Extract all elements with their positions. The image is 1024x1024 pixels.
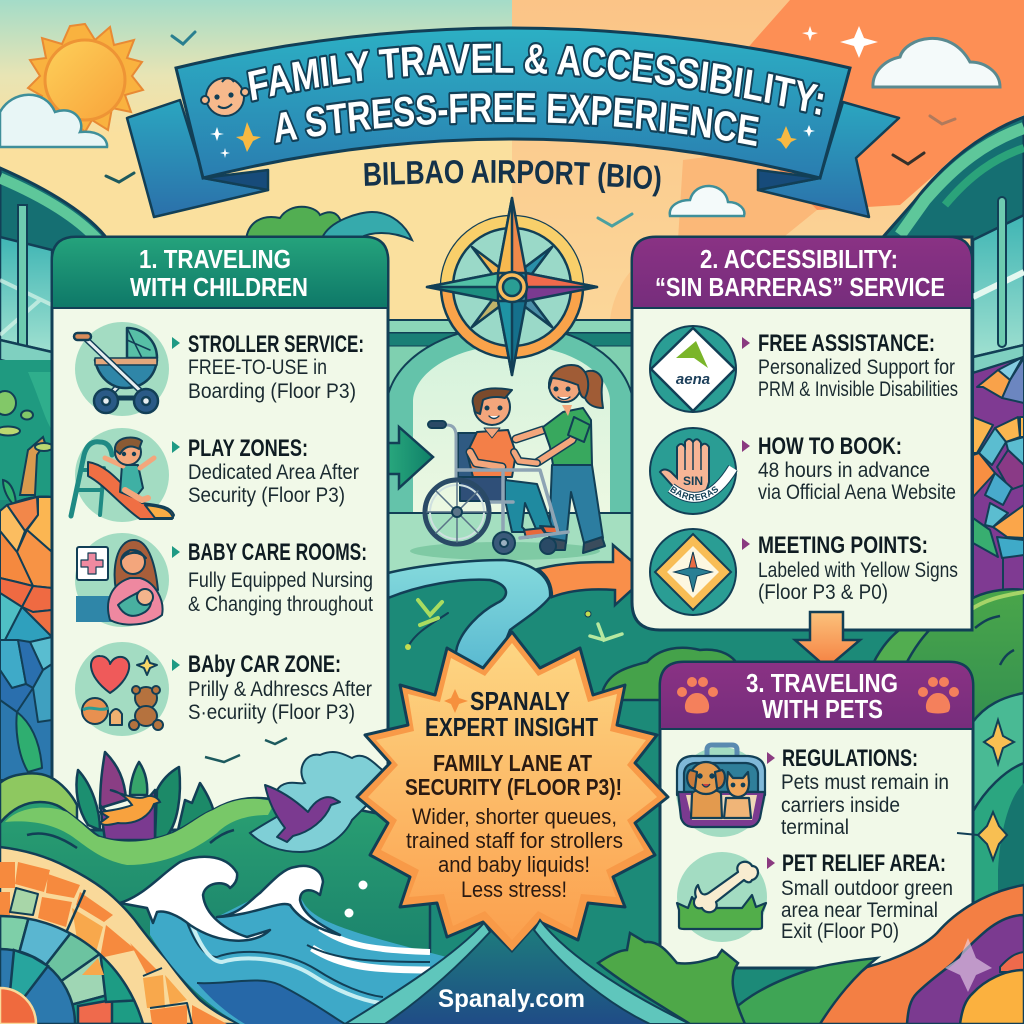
light green ridge	[5, 799, 275, 865]
sparkles on banner	[210, 122, 815, 158]
burst body: trained staff for strollers	[406, 828, 623, 853]
orange arrow down to panel 3	[795, 612, 860, 668]
plants	[76, 752, 214, 840]
compass rose	[427, 198, 597, 375]
birds	[106, 32, 955, 226]
subtitle: BILBAO AIRPORT (BIO)	[364, 160, 660, 196]
bottom centre-right bushes	[598, 933, 877, 1024]
icon: stroller	[74, 322, 169, 416]
lower background teal field	[0, 420, 1024, 1024]
wave crest 2	[217, 866, 340, 935]
banner main ribbon	[176, 28, 850, 178]
orange bird	[100, 790, 160, 825]
orange arrow to panel 2	[538, 545, 648, 605]
play zones text: Dedicated Area After	[188, 460, 359, 484]
how to book text	[758, 433, 956, 504]
vine and leaf sprigs	[405, 600, 622, 650]
expert insight starburst	[357, 632, 668, 953]
burst subheading: SECURITY (FLOOR P3)!	[405, 774, 622, 800]
icon: bone on grass	[677, 852, 767, 942]
panel 3 title: 3. TRAVELING	[746, 668, 898, 698]
burst heading: SPANALY	[470, 686, 570, 716]
burst body: and baby liquids!	[438, 852, 590, 877]
bullet	[742, 337, 750, 349]
free assistance text: Personalized Support for	[758, 355, 955, 379]
bullet	[767, 752, 775, 764]
green bush and leaf behind panel 1	[246, 207, 412, 256]
item: meeting points	[650, 529, 958, 615]
regulations text: terminal	[781, 815, 849, 839]
panel 1 title	[130, 244, 308, 302]
panel 3 header	[660, 662, 973, 729]
meeting points text: (Floor P3 & P0)	[758, 580, 888, 604]
regulations text: Pets must remain in	[781, 770, 949, 794]
burst heading: EXPERT INSIGHT	[425, 712, 598, 742]
free assistance text	[758, 330, 958, 401]
icon: paw right	[918, 677, 959, 714]
icon: paw left	[677, 677, 718, 714]
icon: toys	[75, 642, 169, 736]
meeting points text: Labeled with Yellow Signs	[758, 558, 958, 582]
bush behind panel 3	[603, 648, 740, 700]
panel 3: traveling with pets	[660, 662, 973, 968]
burst body	[406, 804, 623, 902]
right hills	[860, 589, 1024, 1024]
wave crest 1	[120, 857, 270, 941]
banner right tail	[758, 102, 899, 217]
stroller text: Boarding (Floor P3)	[188, 379, 356, 403]
baby care text: Fully Equipped Nursing	[188, 568, 373, 592]
title text: A STRESS-FREE EXPERIENCE	[274, 90, 760, 148]
burst body: Less stress!	[461, 877, 567, 902]
item: regulations	[676, 745, 949, 839]
stroller text: STROLLER SERVICE:	[188, 331, 364, 358]
pet relief text	[781, 850, 953, 943]
bullet	[172, 659, 180, 671]
left mosaic wall	[0, 497, 52, 780]
meeting points text	[758, 532, 958, 604]
panel 2 body	[632, 237, 972, 630]
icon: mother and baby	[75, 533, 169, 627]
bottom right coloured waves	[820, 885, 1024, 1024]
pet relief text: area near Terminal	[781, 898, 938, 922]
panel body	[52, 237, 388, 830]
title banner	[126, 26, 900, 218]
sparkles top right	[802, 26, 878, 58]
baby car zone text: S·ecuriity (Floor P3)	[188, 700, 355, 724]
item: baby care rooms	[75, 533, 373, 627]
baby care text	[188, 539, 373, 616]
cloud left	[0, 95, 107, 147]
sparkle	[444, 689, 468, 713]
wheelchair user and companion illustration	[425, 365, 605, 554]
item: baby car zone	[75, 642, 372, 736]
play zones text: Security (Floor P3)	[188, 483, 345, 507]
panel 2 title: “SIN BARRERAS” SERVICE	[655, 272, 945, 302]
burst subheading: FAMILY LANE AT	[433, 750, 592, 776]
panel 2 header	[632, 237, 972, 308]
item: stroller service	[74, 322, 364, 416]
icon: sin barreras hand: BARRERAS	[670, 486, 718, 501]
how to book text: 48 hours in advance	[758, 458, 930, 482]
mosaic corner	[0, 847, 240, 1024]
sun	[28, 24, 143, 132]
footer mountain	[345, 920, 690, 1024]
panel 2: accessibility sin barreras	[630, 236, 974, 632]
item: play zones	[71, 428, 359, 522]
item: pet relief area	[677, 850, 953, 943]
panel 3 body	[660, 662, 973, 968]
bullet	[172, 546, 180, 558]
baby car zone text	[188, 651, 372, 724]
purple bird	[265, 785, 340, 842]
baby car zone text: Prilly & Adhrescs After	[188, 677, 372, 701]
icon: pet carrier	[676, 745, 766, 837]
play zones text: PLAY ZONES:	[188, 435, 308, 462]
foam dots	[344, 880, 368, 918]
panel 1 title: 1. TRAVELING	[139, 244, 291, 274]
icon: baby face	[201, 78, 249, 116]
panel 1: traveling with children	[52, 237, 388, 830]
bullet	[172, 337, 180, 349]
meeting points text: MEETING POINTS:	[758, 532, 928, 559]
small birds	[205, 738, 287, 762]
footer website text: Spanaly.com	[438, 985, 585, 1013]
item: free assistance	[650, 326, 958, 412]
bullet	[742, 440, 750, 452]
mosaic rings	[0, 914, 144, 1024]
back hill	[0, 773, 77, 860]
regulations text	[781, 745, 949, 839]
sky background	[0, 0, 1024, 420]
green arrow to centre	[360, 427, 433, 488]
burst subheading	[405, 750, 622, 800]
free assistance text: FREE ASSISTANCE:	[758, 330, 935, 357]
stroller text: FREE-TO-USE in	[188, 355, 327, 379]
pet relief text: PET RELIEF AREA:	[782, 850, 946, 877]
teal cloud and pool	[250, 752, 385, 852]
icon: sin barreras hand: SIN	[683, 474, 703, 488]
icon: yellow sign	[650, 529, 736, 615]
item: how to book	[649, 427, 956, 515]
burst heading	[425, 686, 598, 742]
panel 3 title: WITH PETS	[762, 694, 883, 724]
panel 3 title	[746, 668, 898, 724]
gold sparkles right	[957, 720, 1014, 860]
river path	[388, 560, 550, 680]
bottom left green hills, plants and birds	[0, 738, 490, 1024]
panel 2 title: 2. ACCESSIBILITY:	[700, 244, 898, 274]
wave water	[150, 880, 490, 1024]
play zones text	[188, 435, 359, 507]
icon: aena badge: aena	[676, 371, 710, 388]
title text: FAMILY TRAVEL & ACCESSIBILITY:	[246, 42, 826, 118]
baby care text: BABY CARE ROOMS:	[188, 539, 367, 566]
panel 2 title	[655, 244, 945, 302]
stroller text	[188, 331, 364, 403]
cloud right	[873, 38, 1000, 87]
panel 1 header	[52, 237, 388, 308]
panel 1 title: WITH CHILDREN	[130, 272, 308, 302]
how to book text: HOW TO BOOK:	[758, 433, 902, 460]
icon: aena badge	[650, 326, 736, 412]
central terminal building	[388, 320, 632, 573]
free assistance text: PRM & Invisible Disabilities	[758, 377, 958, 401]
main green wave	[0, 798, 430, 1024]
burst body: Wider, shorter queues,	[412, 804, 617, 829]
cloud small	[670, 186, 744, 216]
pet relief text: Exit (Floor P0)	[781, 919, 899, 943]
how to book text: via Official Aena Website	[758, 480, 956, 504]
baby care text: & Changing throughout	[188, 592, 373, 616]
right terminal arch and glass	[883, 117, 1024, 373]
baby car zone text: BAby CAR ZONE:	[188, 651, 341, 678]
bullet	[767, 857, 775, 869]
regulations text: carriers inside	[781, 793, 900, 817]
regulations text: REGULATIONS:	[782, 745, 918, 772]
wheelchair and passenger	[425, 388, 568, 554]
bullet	[172, 441, 180, 453]
left terminal arch and glass	[0, 168, 108, 500]
right mosaic wall	[973, 357, 1024, 600]
pet relief text: Small outdoor green	[781, 876, 953, 900]
companion	[516, 365, 605, 553]
icon: sin barreras hand	[649, 427, 738, 515]
icon: slide	[71, 428, 174, 522]
banner left tail	[127, 100, 268, 217]
left tree	[0, 391, 53, 507]
bullet	[742, 538, 750, 550]
